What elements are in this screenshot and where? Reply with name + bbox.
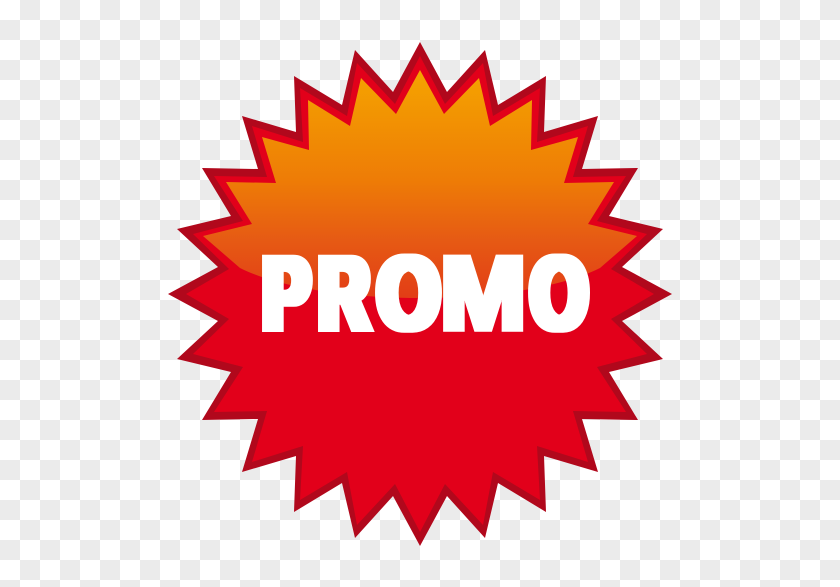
starburst outer dark border: [168, 42, 672, 546]
promo starburst badge: [168, 42, 672, 546]
orange gradient glossy highlight: [203, 70, 637, 298]
PROMO label: P: [263, 235, 309, 352]
PROMO label: [263, 235, 587, 352]
PROMO label: R: [319, 235, 369, 352]
PROMO label: O: [378, 235, 439, 352]
starburst red body: [186, 56, 654, 532]
PROMO label: M: [440, 235, 526, 351]
PROMO label: O: [531, 235, 587, 351]
